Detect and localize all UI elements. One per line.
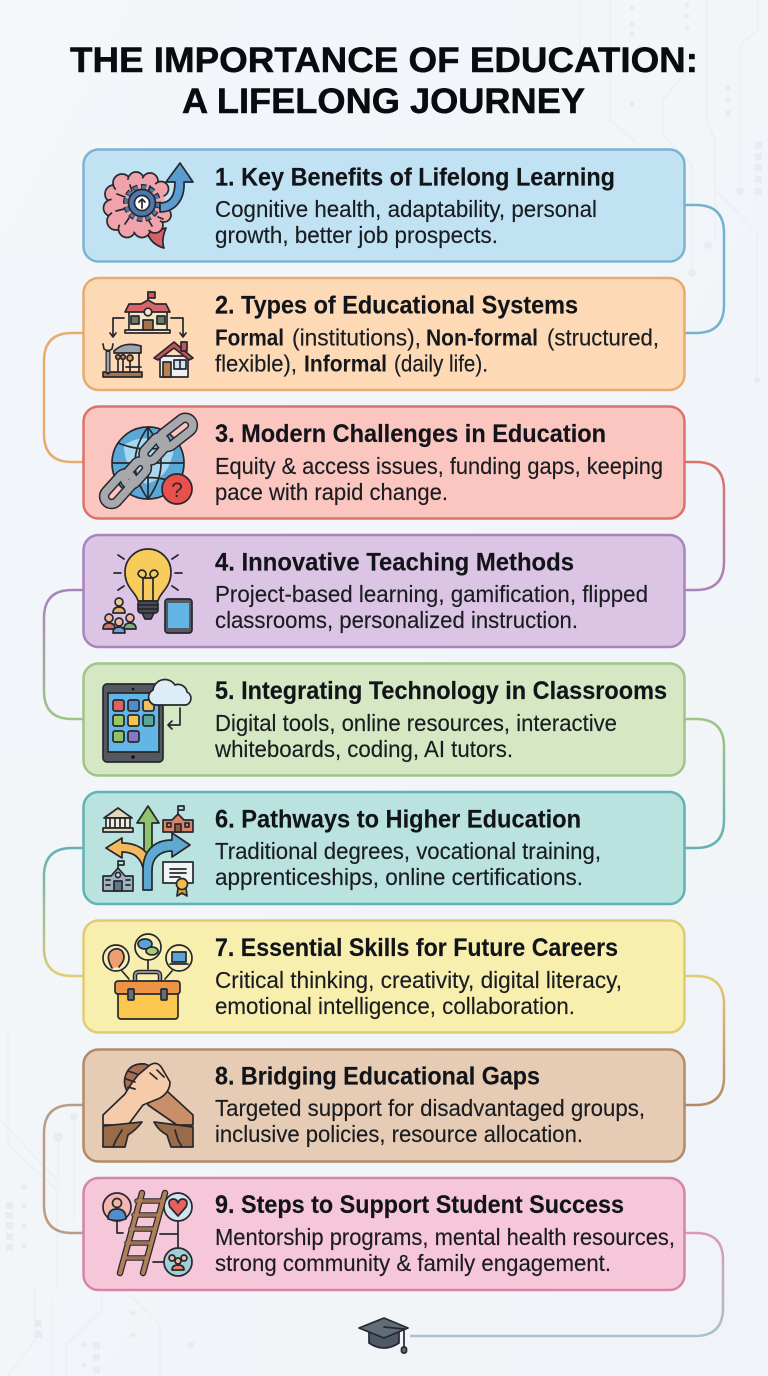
text block: flexible), (215, 350, 297, 376)
text block: strong community & family engagement. (215, 1250, 611, 1276)
title: THE IMPORTANCE OF EDUCATION: (70, 40, 698, 80)
icon: brain with gear and arrow (104, 163, 193, 248)
icon: school, workshop and home (103, 292, 193, 377)
icon: globe with broken chain (101, 415, 196, 507)
panel: 1 key benefits (84, 150, 684, 262)
text block (215, 581, 648, 633)
text block (214, 710, 617, 762)
icon: ladder with mentor, heart and community (103, 1193, 192, 1276)
panel: 4 innovative teaching methods (84, 535, 684, 647)
text block: Targeted support for disadvantaged groups, (215, 1095, 645, 1121)
text block: whiteboards, coding, AI tutors. (214, 736, 513, 762)
text block: pace with rapid change. (215, 479, 448, 505)
heading: 7. Essential Skills for Future Careers (215, 934, 618, 962)
heading: 1. Key Benefits of Lifelong Learning (215, 164, 615, 192)
text block: Critical thinking, creativity, digital literacy, (215, 967, 622, 993)
heading: 2. Types of Educational Systems (215, 292, 578, 320)
heading: 9. Steps to Support Student Success (215, 1191, 624, 1219)
arrow: connector 5 to 6 (684, 719, 724, 848)
text block: apprenticeships, online certifications. (215, 864, 583, 890)
arrow: connector 6 to 7 (44, 848, 84, 976)
text block (215, 967, 622, 1019)
text block: Cognitive health, adaptability, personal (215, 196, 597, 222)
arrow: connector 2 to 3 (44, 333, 84, 462)
text block: Mentorship programs, mental health resources, (215, 1224, 675, 1250)
heading: 5. Integrating Technology in Classrooms (215, 677, 667, 705)
icon: light bulb, people and tablet (103, 549, 192, 633)
heading: 4. Innovative Teaching Methods (215, 548, 574, 576)
text block (215, 453, 663, 505)
text block (215, 1224, 675, 1276)
text block: Non-formal (426, 324, 538, 350)
text block: (structured, (547, 324, 659, 350)
arrow: connector 8 to 9 (44, 1105, 84, 1233)
text block: Digital tools, online resources, interactive (215, 710, 617, 736)
text block: Informal (304, 350, 387, 376)
text block: classrooms, personalized instruction. (215, 607, 578, 633)
panel: 6 pathways to higher education (84, 792, 684, 904)
text block: Traditional degrees, vocational training, (215, 838, 601, 864)
text block: (institutions), (292, 324, 421, 350)
text block (215, 324, 659, 376)
title (70, 40, 698, 121)
text block (215, 1095, 645, 1147)
icon: graduation cap (359, 1318, 408, 1353)
panel: 5 integrating technology (84, 664, 684, 776)
text block (215, 196, 597, 248)
text block: inclusive policies, resource allocation. (215, 1121, 583, 1147)
heading: 8. Bridging Educational Gaps (215, 1062, 540, 1090)
panel: 7 essential skills (84, 920, 684, 1032)
text block: (daily life). (394, 350, 488, 376)
text block: Formal (215, 324, 284, 350)
icon: globe with broken chain: ? (171, 479, 183, 502)
arrow: connector 4 to 5 (44, 590, 84, 719)
heading: 3. Modern Challenges in Education (215, 420, 606, 448)
heading: 6. Pathways to Higher Education (215, 806, 581, 834)
arrow: connector 3 to 4 (684, 462, 724, 590)
arrow: connector 9 to graduation cap (410, 1233, 723, 1336)
text block: Equity & access issues, funding gaps, keeping (215, 453, 663, 479)
panel: 3 modern challenges (84, 406, 684, 518)
text block: Project-based learning, gamification, flipped (215, 581, 648, 607)
title: A LIFELONG JOURNEY (182, 81, 585, 121)
panel: 2 types of educational systems (84, 278, 684, 390)
text block (215, 838, 601, 890)
icon: clasped hands over cliffs (103, 1063, 193, 1147)
panel: 8 bridging educational gaps (84, 1050, 684, 1162)
arrow: connector 1 to 2 (684, 205, 724, 333)
text block: emotional intelligence, collaboration. (215, 993, 575, 1019)
panel: 9 student success (84, 1178, 684, 1290)
icon: tablet with apps and cloud (103, 679, 191, 762)
icon: branching arrows with institutions (103, 806, 193, 896)
icon: toolbox with skill bubbles (103, 934, 192, 1019)
text block: growth, better job prospects. (215, 222, 498, 248)
arrow: connector 7 to 8 (684, 976, 724, 1105)
